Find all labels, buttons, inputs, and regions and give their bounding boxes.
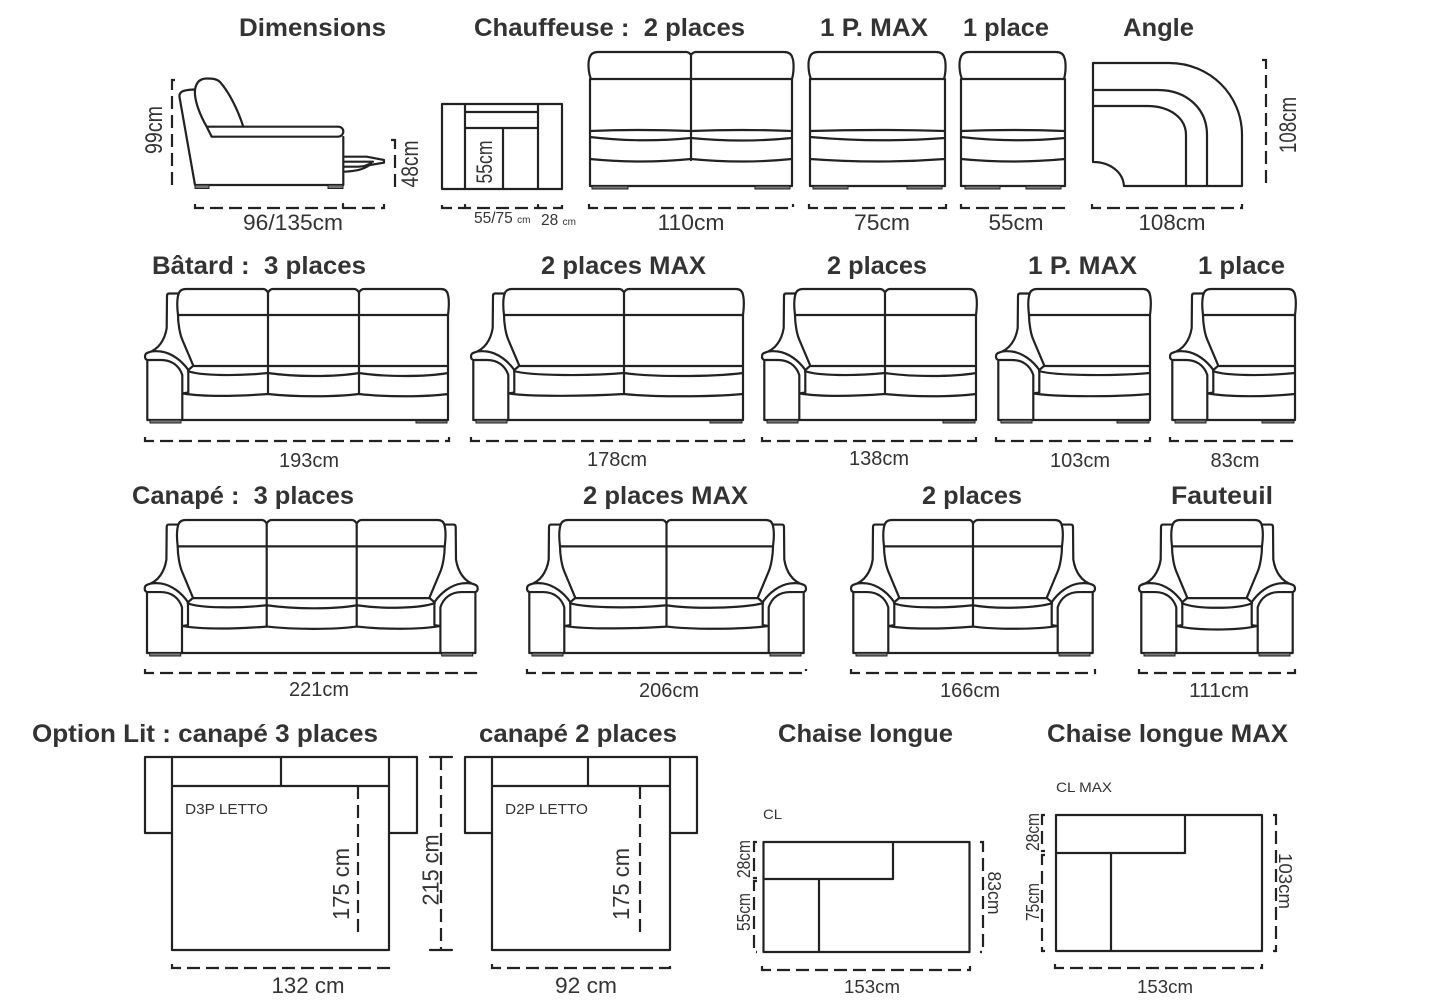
diagram: bâtard 1 P. MAX [996, 289, 1151, 472]
diagram: chaise longue MAX plan [1023, 779, 1295, 997]
diagram: bâtard 2 places [762, 289, 977, 470]
heading: Canapé 2 places: 2 places [922, 482, 1022, 510]
heading: canapé 2 places: canapé 2 places [479, 720, 677, 748]
label: 55cm: 55cm [734, 893, 754, 931]
label: 193cm: 193cm [279, 450, 339, 472]
heading: Bâtard 2 places MAX: 2 places MAX [541, 252, 706, 280]
label: 166cm: 166cm [940, 680, 1000, 702]
diagram: bed plan 2 places [465, 757, 697, 998]
diagram: angle [1092, 60, 1302, 235]
label: 28 cm: 28 cm [541, 212, 576, 229]
label: 55/75 cm: 55/75 cm [474, 210, 530, 227]
label: 206cm: 206cm [639, 680, 699, 702]
heading: Canapé 3 places: Canapé : 3 places [132, 482, 354, 510]
diagram: bâtard 1 place [1170, 289, 1296, 472]
label: 99cm: 99cm [141, 106, 168, 154]
heading: Bâtard 2 places: 2 places [827, 252, 927, 280]
label: 28cm: 28cm [734, 840, 754, 878]
heading: Angle: Angle [1123, 14, 1194, 42]
diagram: chauffeuse 1 place [960, 52, 1066, 235]
heading: Bâtard 3 places: Bâtard : 3 places [152, 252, 366, 280]
diagram: bâtard 2 places MAX [471, 289, 744, 471]
label: D3P LETTO: D3P LETTO [185, 801, 268, 818]
label: 75cm: 75cm [1023, 883, 1043, 921]
heading: Bâtard 1 P. MAX: 1 P. MAX [1028, 252, 1137, 280]
label: 83cm: 83cm [1210, 450, 1260, 472]
diagram: chauffeuse 2 places [589, 52, 794, 235]
label: 103cm: 103cm [1275, 853, 1295, 909]
diagram: bâtard 3 places [145, 289, 449, 472]
label: 111cm: 111cm [1189, 680, 1249, 702]
label: 175 cm: 175 cm [328, 848, 354, 920]
label: 138cm: 138cm [849, 448, 909, 470]
label: D2P LETTO: D2P LETTO [505, 801, 588, 818]
label: 96/135cm: 96/135cm [243, 210, 343, 235]
heading: Chauffeuse 2 places: Chauffeuse : 2 places [474, 14, 745, 42]
label: 175 cm: 175 cm [608, 848, 634, 920]
diagram: side view dimensions [141, 78, 424, 235]
heading: Chaise longue MAX: Chaise longue MAX [1047, 720, 1288, 748]
label: 108cm: 108cm [1138, 210, 1206, 235]
diagram: chaise longue plan [734, 806, 1004, 997]
label: 48cm: 48cm [397, 140, 424, 188]
label: 221cm: 221cm [289, 679, 349, 701]
label: 178cm: 178cm [587, 449, 647, 471]
label: 83cm: 83cm [984, 872, 1004, 914]
label: 215 cm: 215 cm [418, 834, 444, 906]
label: 103cm: 103cm [1050, 450, 1110, 472]
label: 108cm right: 108cm [1275, 97, 1302, 153]
heading: Chauffeuse 1 place: 1 place [963, 14, 1049, 42]
label: 110cm: 110cm [658, 210, 724, 235]
label: CL: CL [763, 806, 782, 822]
diagram: canapé 2 places MAX [527, 520, 806, 702]
heading: Option Lit canapé 3 places: Option Lit : canapé 3 places [32, 720, 378, 748]
label: 55cm: 55cm [472, 140, 497, 184]
label: 153cm: 153cm [1137, 977, 1193, 997]
diagram: bed plan 3 places [145, 757, 452, 998]
label: 55cm: 55cm [988, 210, 1044, 235]
label: 92 cm: 92 cm [555, 973, 617, 998]
heading: Fauteuil: Fauteuil [1171, 482, 1273, 510]
label: 153cm: 153cm [844, 977, 900, 997]
label: CL MAX: CL MAX [1056, 779, 1113, 795]
heading: Canapé 2 places MAX: 2 places MAX [583, 482, 748, 510]
diagram: chauffeuse 1 P. MAX [809, 52, 946, 235]
heading: Chauffeuse 1 P. MAX: 1 P. MAX [820, 14, 928, 42]
label: 28cm: 28cm [1023, 813, 1043, 851]
diagram: canapé 2 places [851, 520, 1095, 702]
diagram: fauteuil [1139, 520, 1295, 702]
label: 75cm: 75cm [854, 210, 910, 235]
diagram: canapé 3 places [145, 520, 478, 701]
heading: Chaise longue: Chaise longue [778, 720, 953, 748]
heading: Bâtard 1 place: 1 place [1198, 252, 1285, 280]
heading: Dimensions: Dimensions [239, 14, 386, 42]
label: 132 cm: 132 cm [272, 973, 344, 998]
diagram: module plan view [442, 104, 576, 229]
